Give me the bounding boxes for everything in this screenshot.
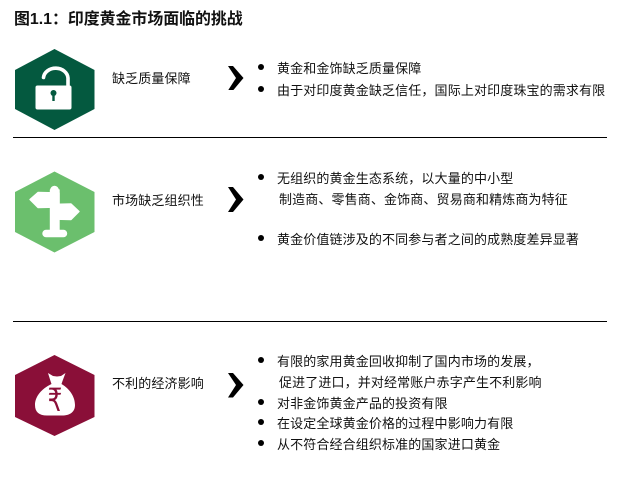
arrow <box>228 373 244 398</box>
panel: adverse economic impact <box>15 354 542 452</box>
icon: signpost on light green hexagon <box>15 172 94 252</box>
label: 缺乏质量保障 <box>112 71 191 86</box>
arrow <box>228 187 244 212</box>
divider <box>13 321 607 322</box>
bullet list: 由于对印度黄金缺乏信任，国际上对印度珠宝的需求有限 <box>277 83 605 98</box>
title: 图1.1：印度黄金市场面临的挑战 <box>14 11 243 28</box>
bullet list: 从不符合经合组织标准的国家进口黄金 <box>277 437 500 452</box>
label: 不利的经济影响 <box>112 376 204 391</box>
icon: open padlock on dark green hexagon <box>15 49 94 130</box>
panel: disorganised market <box>15 171 579 252</box>
divider <box>13 137 607 138</box>
bullet list: 在设定全球黄金价格的过程中影响力有限 <box>277 416 513 431</box>
bullet list: 黄金价值链涉及的不同参与者之间的成熟度差异显著 <box>277 232 579 247</box>
bullet list: 黄金和金饰缺乏质量保障 <box>277 61 421 76</box>
bullet list <box>258 61 605 98</box>
arrow <box>228 66 244 90</box>
bullet list: 有限的家用黄金回收抑制了国内市场的发展， <box>277 354 540 369</box>
bullet list: 无组织的黄金生态系统，以大量的中小型 <box>277 171 513 186</box>
icon: rupee money bag on maroon hexagon: ₹ <box>48 381 62 419</box>
icon: rupee money bag on maroon hexagon <box>15 355 94 436</box>
bullet list: 促进了进口，并对经常账户赤字产生不利影响 <box>279 375 542 390</box>
panel: lack of quality assurance <box>15 49 605 130</box>
bullet list: 制造商、零售商、金饰商、贸易商和精炼商为特征 <box>279 192 568 207</box>
bullet list <box>258 354 542 452</box>
label: 市场缺乏组织性 <box>112 193 204 208</box>
bullet list: 对非金饰黄金产品的投资有限 <box>277 396 448 411</box>
bullet list <box>258 171 579 247</box>
